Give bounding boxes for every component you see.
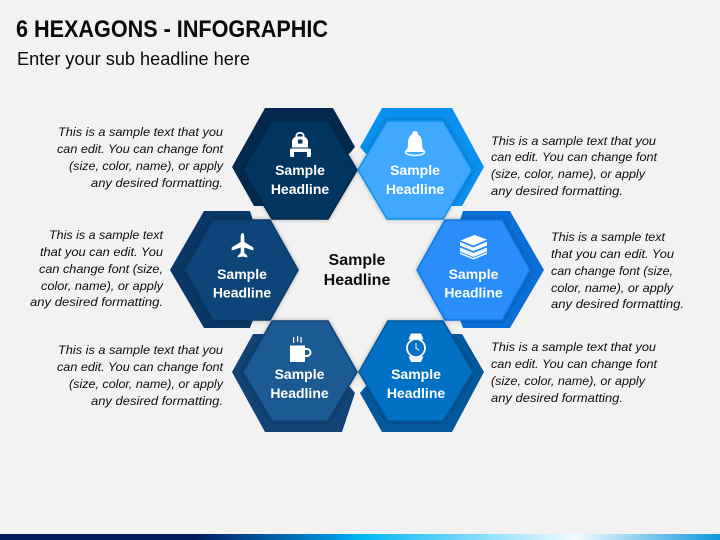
hexagon 3: plane [170,211,298,328]
bottom gradient bar [0,534,720,540]
text block: bottom right: any desired formatting. [491,391,623,405]
label: Sample [275,162,325,178]
hexagon 1: backpack [232,108,357,219]
text block: middle right: This is a sample text [551,230,666,244]
label: Headline [387,385,445,401]
text block: top left: can edit. You can change font [57,142,224,156]
text block: middle left: color, name), or apply [41,279,164,293]
text block: top left: (size, color, name), or apply [69,159,224,173]
text block: bottom right: This is a sample text that you [491,340,656,354]
text block: middle right: color, name), or apply [551,281,674,295]
subtitle: Enter your sub headline here [17,49,250,69]
text block: bottom right: (size, color, name), or apply [491,374,646,388]
text block: top left: This is a sample text that you [58,125,223,139]
hexagon 2: bell [358,108,484,219]
text block: middle left: that you can edit. You [40,245,163,259]
icon: backpack [290,132,311,157]
icon: plane [232,233,253,258]
label: Headline [271,181,329,197]
hexagon 5: coffee cup [232,321,357,432]
label: Sample [275,366,325,382]
text block: middle right: any desired formatting. [551,297,684,311]
text block: bottom left [57,343,224,408]
label: Headline [386,181,444,197]
text block: top left [57,125,224,190]
label: Headline [270,385,329,401]
center headline: Sample [329,252,386,269]
icon: watch [407,334,425,362]
hexagon 6: watch [359,321,484,432]
text block: middle right [551,230,684,311]
text block: bottom left: can edit. You can change font [57,360,224,374]
text block: bottom left: any desired formatting. [91,394,223,408]
text block: top right: any desired formatting. [491,184,623,198]
hexagon 4: books [417,211,544,328]
icon: coffee cup [290,336,312,362]
text block: middle left [30,228,164,309]
text block: middle left: This is a sample text [49,228,164,242]
label: Sample [390,162,440,178]
label: Headline [213,284,271,300]
label: Headline [444,284,503,300]
text block: bottom left: (size, color, name), or apply [69,377,224,391]
text block: bottom right: can edit. You can change font [491,357,658,371]
icon: bell [405,131,425,156]
label: Sample [449,266,499,282]
center headline: Headline [324,272,390,289]
text block: top right: (size, color, name), or apply [491,167,646,181]
text block: middle right: that you can edit. You [551,247,674,261]
label: Sample [217,266,267,282]
text block: middle right: can change font (size, [551,264,673,278]
text block: middle left: any desired formatting. [30,295,163,309]
text block: bottom left: This is a sample text that you [58,343,223,357]
text block: middle left: can change font (size, [39,262,163,276]
label: Sample [391,366,441,382]
icon: books [460,235,487,260]
title: 6 HEXAGONS - INFOGRAPHIC [16,16,328,43]
text block: top left: any desired formatting. [91,176,223,190]
text block: top right: This is a sample text that you [491,134,656,148]
text block: top right: can edit. You can change font [491,150,658,164]
text block: bottom right [491,340,658,405]
text block: top right [491,134,658,198]
